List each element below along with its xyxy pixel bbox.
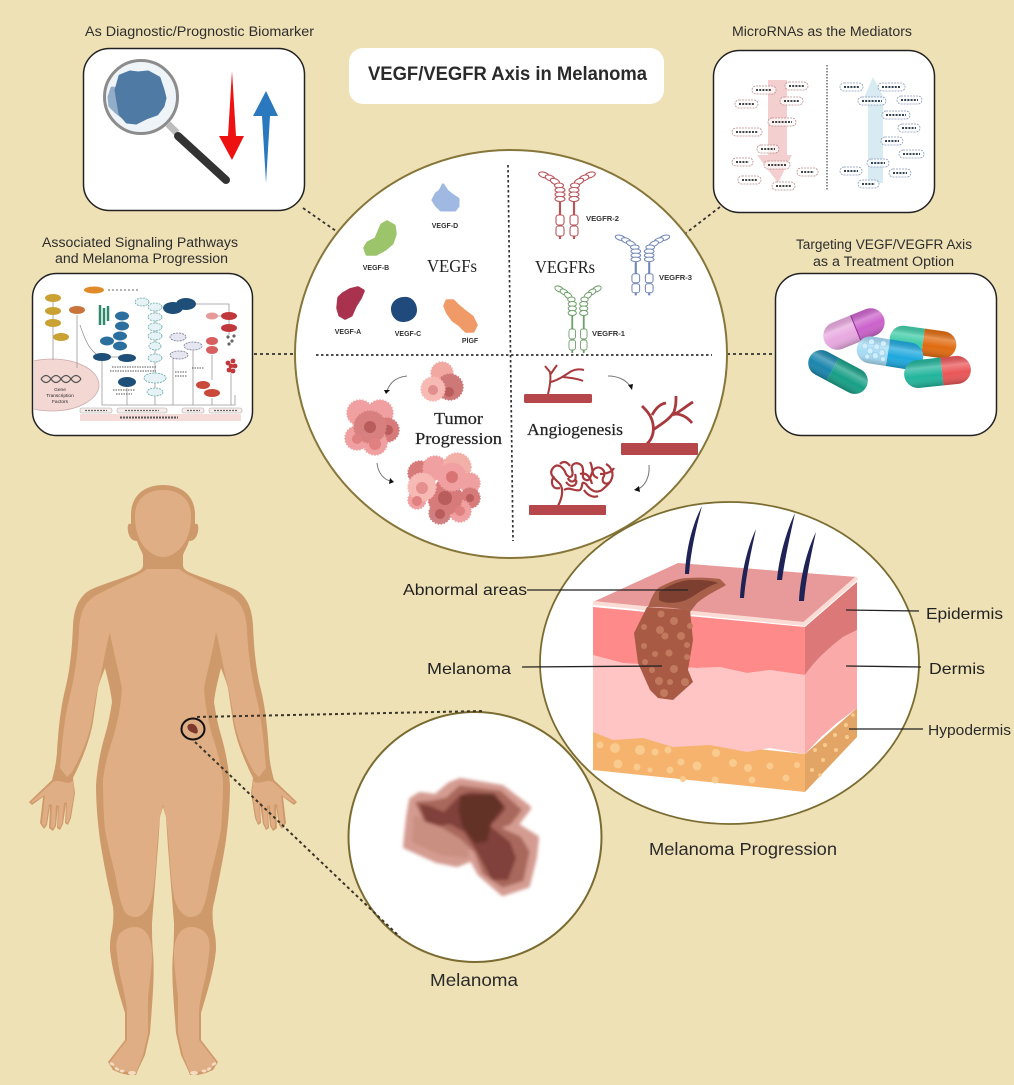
icon: granular blue capsule	[855, 334, 925, 372]
melanoma marker on torso	[182, 718, 204, 740]
quadrant: angiogenesis	[524, 365, 698, 515]
arrow: pink down	[757, 80, 792, 183]
icon: purple capsule	[819, 304, 889, 354]
heading: treatment	[796, 237, 972, 269]
heading: tumor progression: Progression	[415, 429, 502, 448]
label: dermis: Dermis	[929, 661, 985, 678]
icon: VEGF-C	[391, 297, 417, 322]
icon: VEGF-D	[433, 185, 458, 210]
lesion	[406, 781, 536, 893]
label: hypodermis: Hypodermis	[928, 723, 1011, 739]
skin block	[593, 506, 857, 792]
label: VEGF-A: VEGF-A	[335, 329, 361, 336]
icon: VEGF-B	[365, 222, 395, 254]
nucleus with DNA: Factors	[52, 399, 69, 405]
arrow: pale blue up	[863, 77, 885, 183]
nucleus with DNA: Gene	[54, 387, 66, 393]
hairs	[685, 506, 816, 601]
label: VEGF-D: VEGF-D	[432, 223, 458, 230]
title: VEGF/VEGFR Axis in Melanoma	[368, 64, 647, 85]
label: VEGFR-3: VEGFR-3	[659, 275, 692, 282]
layer: hypodermis	[593, 708, 857, 792]
quadrant: tumor progression	[345, 362, 502, 524]
chart: upregulated microRNA tags	[840, 83, 924, 188]
body: light fill right half	[163, 490, 295, 1073]
panel: microRNAs	[714, 50, 934, 212]
chart: downregulated microRNA tags	[732, 82, 818, 190]
layer: epidermis	[593, 582, 857, 675]
layer: skin surface	[593, 563, 857, 624]
quadrant: VEGFRs	[535, 171, 692, 353]
heading: treatment: as a Treatment Option	[813, 254, 954, 269]
heading: tumor progression	[415, 409, 502, 448]
icon: teal and orange capsule	[888, 324, 958, 360]
connector: dotted lines from panels to central circle	[254, 207, 775, 354]
icon: blue up arrow	[253, 91, 278, 183]
icon: VEGFR-1	[554, 285, 602, 353]
heading: treatment: Targeting VEGF/VEGFR Axis	[796, 237, 972, 252]
heading: signaling pathways	[42, 235, 238, 266]
outcome boxes	[80, 408, 242, 421]
icon: branching vessel	[621, 396, 698, 455]
heading: microRNAs: MicroRNAs as the Mediators	[732, 24, 912, 39]
heading: signaling pathways: Associated Signaling Pathways	[42, 235, 238, 250]
label: melanoma in skin: Melanoma	[427, 661, 511, 678]
label: abnormal areas: Abnormal areas	[403, 582, 527, 599]
caption: melanoma progression: Melanoma Progression	[649, 839, 837, 859]
label: VEGF-C: VEGF-C	[395, 331, 421, 338]
figure: human body	[29, 485, 297, 1075]
label: epidermis: Epidermis	[926, 606, 1003, 623]
heading: VEGFs: VEGFs	[427, 256, 477, 276]
panel: biomarker	[84, 48, 304, 210]
icon: small tumor	[421, 362, 463, 401]
icon: early vessel sprouting	[524, 365, 592, 403]
title	[349, 48, 664, 104]
nucleus with DNA: Transcription	[46, 393, 74, 399]
caption: melanoma: Melanoma	[430, 970, 518, 990]
panel: central circle	[295, 150, 727, 558]
connector: dotted lines from body marker to melanoma circle	[195, 711, 483, 937]
body: silhouette left half	[29, 485, 163, 1075]
label: dermis	[846, 661, 985, 678]
heading: signaling pathways: and Melanoma Progression	[55, 251, 228, 266]
gold proteins	[45, 294, 69, 341]
icon: tortuous vessel network	[529, 462, 614, 515]
toes	[109, 1061, 217, 1075]
icon: PlGF	[445, 301, 476, 331]
panel: melanoma close-up circle	[348, 712, 602, 962]
icon: teal and red capsule	[903, 355, 972, 389]
icon: medium tumor	[345, 400, 399, 455]
heading: biomarker: As Diagnostic/Prognostic Biomarker	[85, 24, 315, 39]
panel: signaling pathways	[5, 274, 252, 436]
panel: skin cross-section circle	[540, 502, 919, 824]
quadrant: VEGFs	[335, 185, 479, 345]
arrow: tumor growth one	[384, 376, 407, 394]
arrow: tumor growth two	[377, 463, 394, 484]
heading: VEGFRs: VEGFRs	[535, 257, 595, 277]
label: VEGF-B: VEGF-B	[363, 265, 389, 272]
panel: treatment	[776, 274, 996, 436]
melanoma in skin	[634, 578, 726, 700]
icon: magnifying glass over tumor	[104, 60, 226, 180]
icon: VEGFR-3	[615, 234, 670, 295]
icon: VEGF-A	[338, 288, 363, 318]
blue proteins	[100, 312, 129, 350]
body: silhouette right half	[163, 485, 297, 1075]
icon: VEGFR-2	[538, 171, 596, 239]
label: VEGFR-2: VEGFR-2	[586, 216, 619, 223]
arrow: angiogenesis one	[608, 376, 633, 390]
heading: angiogenesis: Angiogenesis	[527, 420, 623, 439]
icon: large tumor	[408, 453, 480, 524]
body: light fill left half	[31, 490, 163, 1073]
label: PlGF: PlGF	[462, 338, 479, 345]
nucleus with DNA	[34, 358, 100, 412]
label: VEGFR-1: VEGFR-1	[592, 331, 625, 338]
layer: dermis	[593, 630, 857, 754]
icon: blue and teal capsule	[804, 345, 872, 399]
pale proteins	[135, 298, 166, 396]
heading: tumor progression: Tumor	[434, 409, 484, 428]
arrow: angiogenesis two	[634, 465, 649, 492]
red proteins	[196, 312, 237, 397]
icon: red down arrow	[219, 71, 244, 160]
